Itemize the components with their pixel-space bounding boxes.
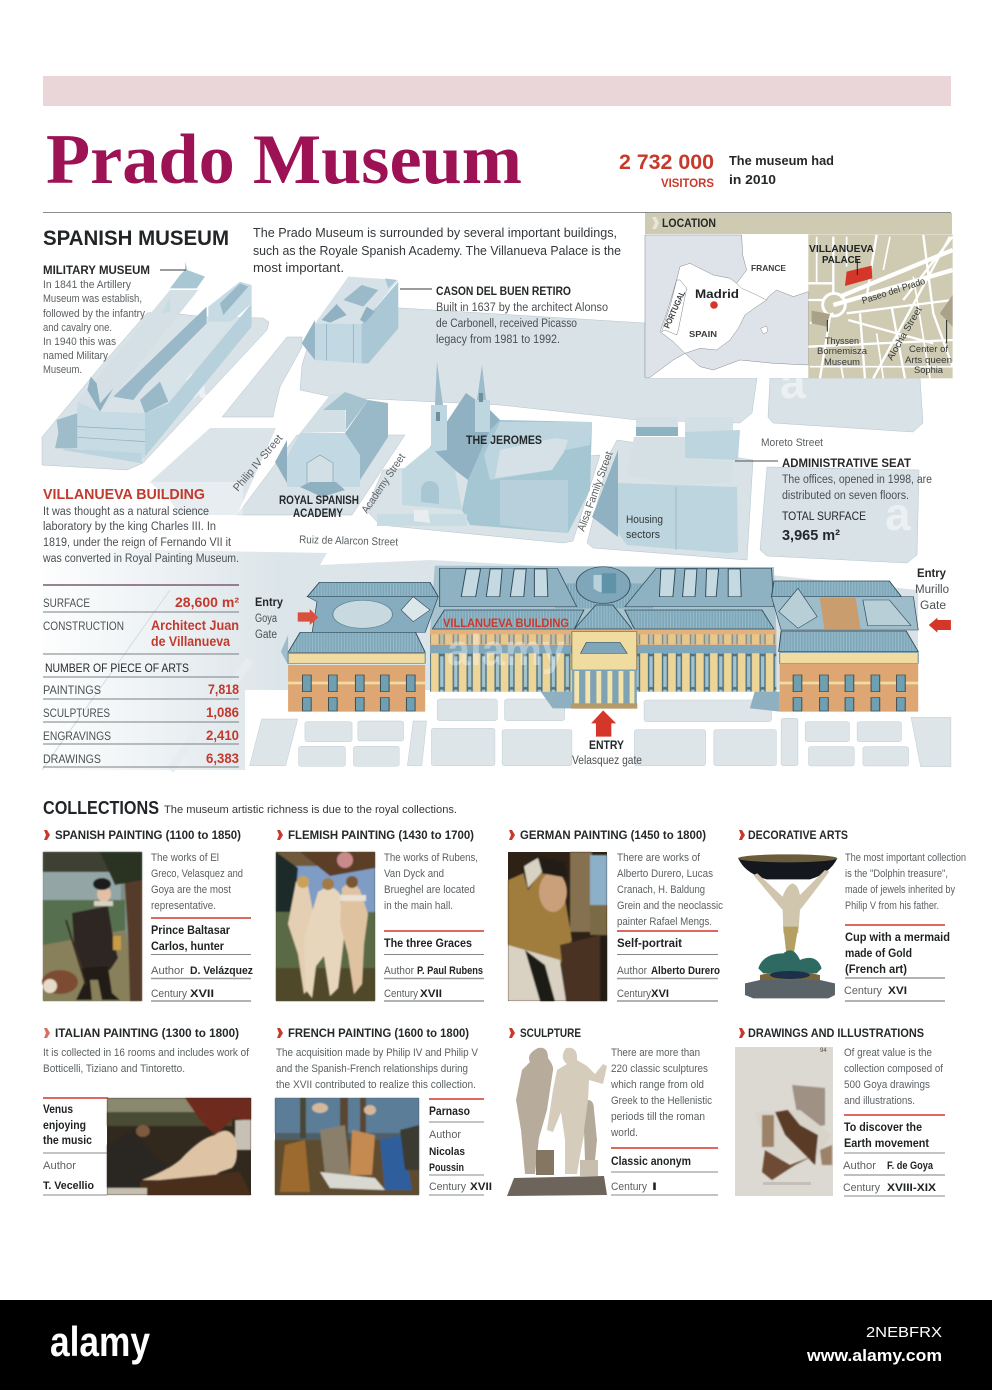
artwork details: Cup with a mermaid [845, 930, 950, 944]
street blocks [42, 307, 923, 563]
street labels: Academy Street [360, 452, 408, 516]
villanueva building text: VILLANUEVA BUILDING [43, 486, 205, 503]
label: military museum: In 1841 the Artillery [43, 279, 131, 291]
description [384, 852, 478, 912]
street labels: Alisa Family Street [576, 450, 616, 533]
stats table: 6,383 [206, 751, 239, 766]
stats table: ENGRAVINGS [43, 731, 111, 743]
description: Grein and the neoclassic [617, 900, 723, 912]
description: The works of Rubens, [384, 852, 478, 864]
royal spanish academy building [275, 392, 388, 497]
description: Botticelli, Tiziano and Tintoretto. [43, 1063, 185, 1075]
stats table: 2,410 [206, 728, 239, 743]
collections heading [43, 798, 457, 818]
location text: Madrid [695, 287, 739, 301]
panel: drawings and illustrations: DRAWINGS AND ILLUSTRATIONS [748, 1028, 924, 1040]
artwork details: P. Paul Rubens [417, 965, 483, 977]
description: periods till the roman [611, 1111, 705, 1123]
intro paragraph: The Prado Museum is surrounded by several important buildings, [253, 225, 617, 240]
label: royal spanish academy: ACADEMY [293, 508, 343, 520]
description: made of jewels inherited by [845, 884, 955, 896]
artwork details: Self-portrait [617, 936, 682, 950]
watermark marks: a [182, 356, 208, 408]
stats table: SURFACE [43, 598, 90, 610]
housing sectors and administrative building [592, 417, 740, 553]
stats table: DRAWINGS [43, 754, 101, 766]
panel: decorative arts: DECORATIVE ARTS [748, 830, 848, 842]
artwork details: T. Vecellio [43, 1180, 94, 1192]
label: housing sectors: Housing [626, 514, 663, 526]
label: goya gate: Goya [255, 613, 277, 625]
label: murillo gate: Gate [920, 600, 946, 612]
location text: VILLANUEVA [809, 243, 874, 255]
description: Greco, Velasquez and [151, 868, 243, 880]
artwork details: made of Gold [845, 946, 912, 960]
label: housing sectors [626, 514, 663, 541]
footer bar [0, 1300, 992, 1390]
artwork details: Parnaso [429, 1104, 470, 1118]
collections heading: COLLECTIONS [43, 798, 159, 818]
label: administrative seat: The offices, opened in 1998, are [782, 474, 932, 486]
intro paragraph: such as the Royale Spanish Academy. The Villanueva Palace is the [253, 243, 621, 258]
artwork details: Classic anonym [611, 1154, 691, 1168]
watermark marks: a [630, 488, 656, 540]
stats table: 28,600 m² [175, 595, 240, 610]
panel: french painting: FRENCH PAINTING (1600 to 1800) [288, 1028, 469, 1040]
label: goya gate [255, 597, 284, 641]
street labels: Moreto Street [761, 437, 823, 449]
central dome [576, 567, 630, 603]
description: painter Rafael Mengs. [617, 916, 712, 928]
label: cason del buen retiro: Built in 1637 by the architect Alonso [436, 302, 608, 314]
stats table: 1,086 [206, 705, 239, 720]
description: Greek to the Hellenistic [611, 1095, 712, 1107]
label: administrative seat: 3,965 m² [782, 527, 840, 544]
stats table: NUMBER OF PIECE OF ARTS [45, 663, 189, 675]
image: self-portrait [508, 852, 607, 1001]
panel: sculpture: SCULPTURE [520, 1028, 581, 1040]
stats table: CONSTRUCTION [43, 621, 124, 633]
artwork details: Earth movement [844, 1136, 929, 1150]
visitors statistic: in 2010 [729, 172, 776, 187]
panel: german painting: GERMAN PAINTING (1450 to 1800) [520, 830, 706, 842]
image: parnaso [275, 1098, 419, 1195]
description: and the Spanish-French relationships during [276, 1063, 468, 1075]
location text: PORTUGAL [662, 289, 687, 330]
description: is the "Dolphin treasure", [845, 868, 948, 880]
artwork details: enjoying [43, 1118, 86, 1132]
label: military museum [43, 265, 186, 376]
artwork details: Century [151, 988, 187, 1000]
description: It is collected in 16 rooms and includes work of [43, 1047, 250, 1059]
label: military museum: Museum. [43, 364, 82, 376]
image: goya drawing [735, 1047, 833, 1196]
artwork details: XVII [190, 988, 214, 1000]
label: military museum: In 1940 this was [43, 336, 116, 348]
description: the XVII contributed to realize this collection. [276, 1079, 476, 1091]
description: which range from old [610, 1079, 704, 1091]
label: military museum: followed by the infantry [43, 308, 145, 320]
stats table: Architect Juan [151, 618, 239, 633]
artwork details: Prince Baltasar [151, 923, 230, 937]
description: There are more than [611, 1047, 700, 1059]
description [276, 1047, 479, 1091]
artwork details: Author [151, 965, 184, 977]
artwork details: the music [43, 1133, 92, 1147]
description: Philip V from his father. [845, 900, 939, 912]
location text: LOCATION [662, 218, 716, 230]
artwork details: Century [617, 988, 651, 1000]
panel: decorative arts [738, 830, 966, 1001]
image: prince baltasar carlos [42, 852, 142, 1001]
description [844, 1047, 944, 1107]
location text: Arts queen [905, 355, 952, 366]
artwork details: XVII [420, 988, 442, 1000]
intro paragraph [253, 225, 621, 275]
artwork details: Author [429, 1129, 461, 1141]
location text: Alocha Street [885, 305, 925, 362]
location text: Bornemisza [817, 346, 868, 357]
aerial map of surrounding buildings [42, 262, 923, 563]
artwork details: XVI [651, 988, 669, 1000]
label: administrative seat: TOTAL SURFACE [782, 511, 866, 523]
artwork details [843, 1115, 945, 1196]
artwork details: F. de Goya [887, 1160, 934, 1172]
description: There are works of [617, 852, 701, 864]
label: cason del buen retiro: de Carbonell, received Picasso [436, 318, 577, 330]
footer bar: www.alamy.com [806, 1346, 942, 1365]
label: housing sectors: sectors [626, 529, 660, 541]
artwork details: Author [43, 1160, 76, 1172]
stats table: SCULPTURES [43, 708, 110, 720]
collections heading: The museum artistic richness is due to the royal collections. [164, 804, 457, 816]
location text [662, 218, 952, 376]
description: Goya are the most [151, 884, 231, 896]
artwork details [617, 931, 720, 1001]
location text: Thyssen [825, 336, 859, 347]
visitors statistic: The museum had [729, 153, 834, 168]
artwork details: Venus [43, 1102, 73, 1116]
description [151, 852, 243, 912]
artwork details: Alberto Durero [651, 965, 720, 977]
street blocks in front [250, 699, 951, 767]
location text: Museum [824, 357, 860, 368]
location text: Paseo del Prado [861, 276, 927, 307]
artwork details [384, 931, 484, 1001]
central portico [572, 632, 637, 670]
description: and illustrations. [844, 1095, 915, 1107]
description: 500 Goya drawings [844, 1079, 930, 1091]
label: military museum: and cavalry one. [43, 322, 112, 334]
artwork details: Poussin [429, 1162, 464, 1174]
visitors statistic [619, 151, 834, 190]
location text: PALACE [822, 254, 861, 266]
artwork details: Author [843, 1160, 876, 1172]
villanueva building text: laboratory by the king Charles III. In [43, 521, 216, 533]
description: world. [610, 1127, 638, 1139]
label: murillo gate: Murillo [915, 584, 949, 596]
panel: sculpture [507, 1028, 718, 1196]
location text: FRANCE [751, 263, 786, 273]
street map [808, 234, 953, 378]
visitors statistic: 2 732 000 [619, 151, 714, 174]
artwork details: XVII [470, 1181, 492, 1193]
title: Prado Museum [46, 121, 522, 199]
artwork details: Author [617, 965, 647, 977]
military museum building [55, 262, 252, 463]
artwork details: D. Velázquez [190, 965, 253, 977]
street labels [231, 433, 823, 549]
arrow: murillo gate entry [929, 618, 951, 633]
sea and neighbouring land [645, 235, 808, 377]
label: velasquez gate: ENTRY [589, 740, 624, 752]
footer bar: alamy [50, 1318, 151, 1365]
panel: spanish painting: SPANISH PAINTING (1100 to 1850) [55, 830, 241, 842]
label: the jeromes: THE JEROMES [466, 435, 542, 447]
label: administrative seat: distributed on seven floors. [782, 490, 909, 502]
right pavilion [772, 581, 918, 712]
left text fade over map [43, 482, 243, 564]
panel: location [645, 213, 953, 378]
villanueva building text: was converted in Royal Painting Museum. [42, 553, 239, 565]
description [845, 852, 966, 912]
panel: italian painting: ITALIAN PAINTING (1300 to 1800) [55, 1028, 239, 1040]
stats table: 7,818 [208, 682, 239, 697]
palace watermark: alamy [447, 626, 565, 675]
location text: Center of [909, 344, 948, 355]
description: representative. [151, 900, 216, 912]
villanueva palace ground [42, 548, 918, 770]
footer bar: 2NEBFRX [866, 1324, 942, 1341]
panel: italian painting [43, 1028, 251, 1195]
description: Van Dyck and [384, 868, 444, 880]
artwork details [844, 925, 950, 1001]
label: military museum: MILITARY MUSEUM [43, 265, 150, 277]
panel: german painting [508, 830, 723, 1001]
villanueva building text: It was thought as a natural science [43, 506, 209, 518]
middle roofs [432, 610, 584, 629]
label: cason del buen retiro: CASON DEL BUEN RETIRO [436, 286, 571, 298]
arrow: velasquez gate entry [591, 710, 616, 737]
artwork details [43, 1098, 108, 1195]
label: villanueva building on palace: VILLANUEVA BUILDING [443, 618, 569, 630]
description: Alberto Durero, Lucas [617, 868, 713, 880]
villanueva palace illustration [250, 566, 951, 767]
watermark marks: a [780, 356, 806, 408]
watermark marks: a [885, 488, 911, 540]
label: military museum: named Military [43, 350, 108, 362]
artwork details: Century [384, 988, 418, 1000]
artwork details [429, 1099, 492, 1195]
image: classic sculpture [507, 1048, 607, 1196]
shadows [281, 635, 288, 665]
artwork details: XVIII-XIX [887, 1182, 937, 1194]
image: goya drawing: 94 [820, 1048, 827, 1054]
the jeromes church [377, 362, 592, 533]
panel: flemish painting [276, 830, 484, 1001]
artwork details: XVI [888, 985, 907, 997]
description: Of great value is the [844, 1047, 932, 1059]
intro paragraph: most important. [253, 260, 344, 275]
description [617, 852, 723, 928]
label: velasquez gate: Velasquez gate [572, 755, 642, 767]
artwork details: The three Graces [384, 936, 472, 950]
description [610, 1047, 712, 1139]
left pavilion [288, 582, 438, 712]
panel: french painting [275, 1028, 492, 1195]
villanueva building text [42, 486, 239, 565]
artwork details: To discover the [844, 1120, 922, 1134]
description [43, 1047, 250, 1075]
label: administrative seat [735, 458, 932, 544]
heading: spanish museum: SPANISH MUSEUM [43, 227, 229, 250]
villanueva building text: 1819, under the reign of Fernando VII it [43, 537, 232, 549]
stats table: PAINTINGS [43, 685, 101, 697]
label: royal spanish academy [279, 495, 359, 520]
label: goya gate: Gate [255, 629, 277, 641]
artwork details: Century [843, 1182, 880, 1194]
artwork details: Century [611, 1181, 647, 1193]
stats table: de Villanueva [151, 634, 230, 649]
label: administrative seat: ADMINISTRATIVE SEAT [782, 458, 911, 470]
image: cup with a mermaid [738, 854, 837, 998]
header band [43, 76, 951, 106]
description: 220 classic sculptures [611, 1063, 708, 1075]
stats table [43, 585, 240, 767]
artwork details: I [652, 1181, 657, 1193]
label: murillo gate: Entry [917, 568, 947, 580]
description: The works of El [151, 852, 219, 864]
description: collection composed of [844, 1063, 944, 1075]
label: royal spanish academy: ROYAL SPANISH [279, 495, 359, 507]
watermark marks [182, 356, 911, 540]
central wing facade [430, 630, 776, 692]
artwork details: Carlos, hunter [151, 939, 224, 953]
description: Brueghel are located [384, 884, 475, 896]
label: cason del buen retiro [400, 286, 608, 346]
artwork details [151, 918, 253, 1001]
artwork details: Century [429, 1181, 466, 1193]
label: velasquez gate [572, 740, 642, 767]
artwork details: Century [844, 985, 882, 997]
visitors statistic: VISITORS [661, 178, 714, 190]
description: The most important collection [845, 852, 966, 864]
image: venus enjoying the music [107, 1098, 251, 1195]
location text: Sophia [914, 365, 944, 376]
arrow: goya gate entry [298, 609, 318, 625]
description: The acquisition made by Philip IV and Philip V [276, 1047, 479, 1059]
artwork details: (French art) [845, 962, 907, 976]
description: in the main hall. [384, 900, 453, 912]
street labels: Philip IV Street [231, 433, 285, 494]
artwork details: Nicolas [429, 1146, 465, 1158]
artwork details [611, 1148, 718, 1195]
label: murillo gate [915, 568, 949, 612]
panel: drawings and illustrations [735, 1028, 945, 1196]
label: goya gate: Entry [255, 597, 284, 609]
panel: spanish painting [42, 830, 253, 1001]
street labels: Ruiz de Alarcon Street [299, 534, 398, 549]
panel: flemish painting: FLEMISH PAINTING (1430 to 1700) [288, 830, 474, 842]
label: cason del buen retiro: legacy from 1981 to 1992. [436, 334, 560, 346]
upper roofs [430, 566, 776, 632]
cason del buen retiro building [302, 277, 398, 363]
image: the three graces [276, 852, 375, 1001]
artwork details: Author [384, 965, 414, 977]
label: military museum: Museum was establish, [43, 293, 142, 305]
description: Cranach, H. Baldung [617, 884, 705, 896]
location text: SPAIN [689, 329, 717, 339]
